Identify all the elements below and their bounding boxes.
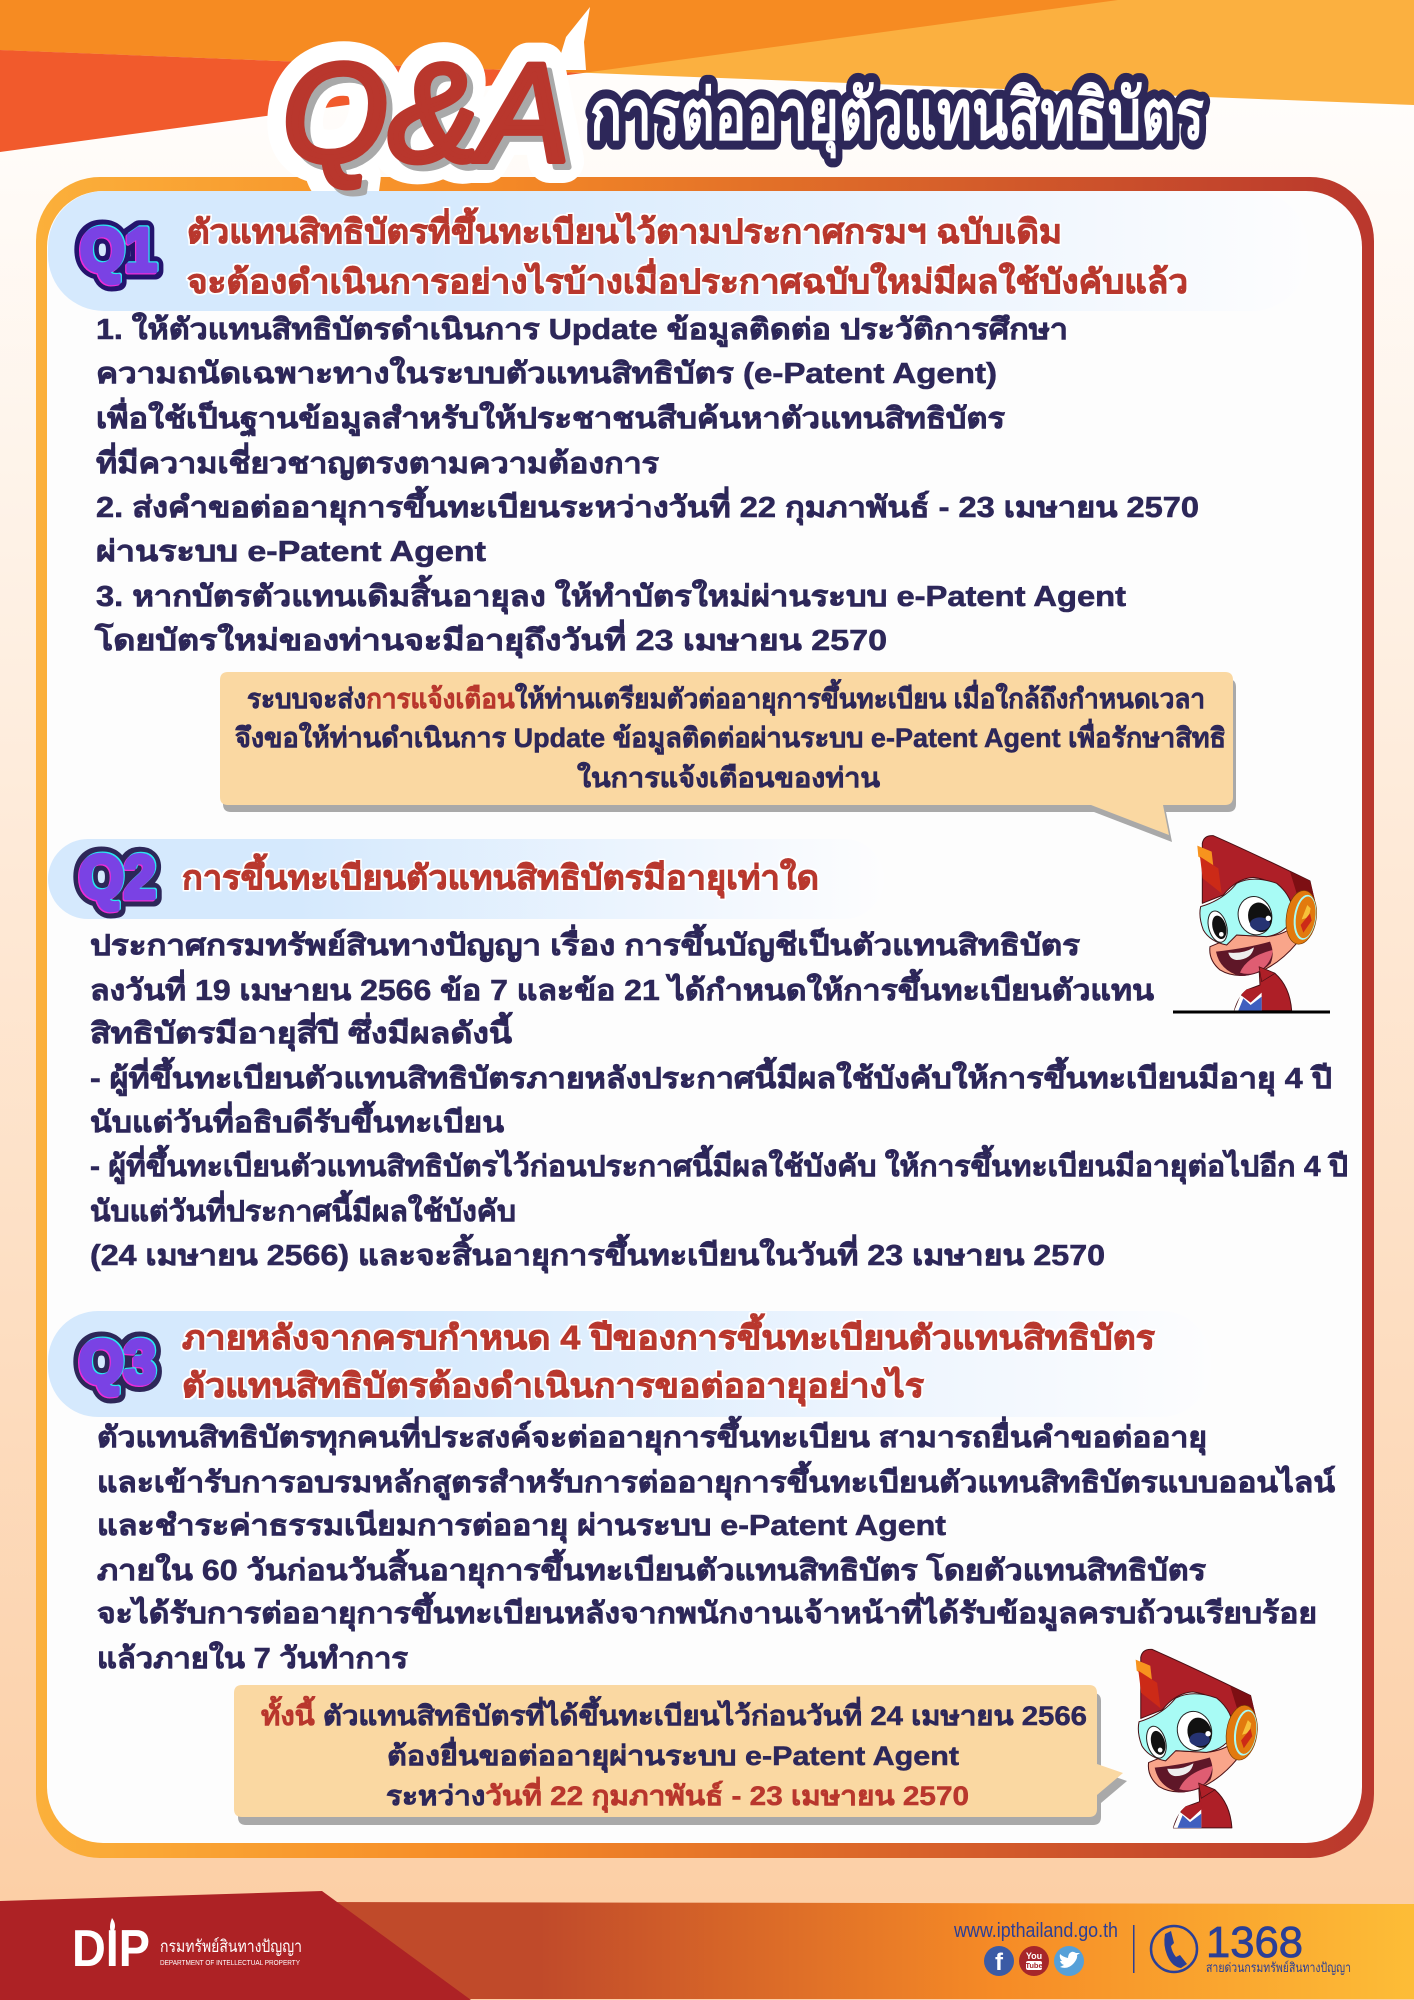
text block: Q2 answer: - ผู้ที่ขึ้นทะเบียนตัวแทนสิทธิบัตรไว้ก่อนประกาศนี้มีผลใช้บังคับ ให้การขึ้นทะเบียนมีอายุต่อไปอีก 4 ปี	[90, 1144, 1348, 1184]
contact: website and social icons: www.ipthailand.go.th	[953, 1920, 1118, 1942]
badge: Q3: Q3	[80, 1327, 157, 1395]
text block: Q1 answer	[94, 312, 1199, 658]
callout: deadline note	[234, 1685, 1127, 1825]
text block: Q3 answer: ภายใน 60 วันก่อนวันสิ้นอายุการขึ้นทะเบียนตัวแทนสิทธิบัตร โดยตัวแทนสิทธิบัตร	[97, 1548, 1206, 1588]
badge: Q3: Q3	[79, 1328, 156, 1396]
footer band	[0, 1891, 1414, 2000]
heading text: Q1: จะต้องดำเนินการอย่างไรบ้างเมื่อประกาศฉบับใหม่มีผลใช้บังคับแล้ว	[187, 258, 1188, 300]
text block: Q2 answer: สิทธิบัตรมีอายุสี่ปี ซึ่งมีผลดังนี้	[90, 1011, 513, 1051]
heading text: Q3: ภายหลังจากครบกำหนด 4 ปีของการขึ้นทะเบียนตัวแทนสิทธิบัตร	[182, 1313, 1155, 1356]
text block: Q2 answer: นับแต่วันที่อธิบดีรับขึ้นทะเบียน	[90, 1100, 504, 1139]
hotline: 1368: 1368	[1206, 1918, 1303, 1967]
heading text: Q3	[182, 1313, 1155, 1407]
text block: Q1 answer: ความถนัดเฉพาะทางในระบบตัวแทนสิทธิบัตร (e-Patent Agent)	[96, 356, 997, 390]
badge: Q2: Q2	[79, 843, 156, 911]
title: Q&A: Q&A	[282, 34, 570, 191]
badge: Q3: Q3	[79, 1328, 156, 1396]
logo: DIP: กรมทรัพย์สินทางปัญญา	[160, 1937, 302, 1956]
text block: Q2 answer: - ผู้ที่ขึ้นทะเบียนตัวแทนสิทธิบัตรภายหลังประกาศนี้มีผลใช้บังคับให้การขึ้นทะเบียนมีอายุ 4 ปี	[90, 1056, 1332, 1096]
text block: Q2 answer: ลงวันที่ 19 เมษายน 2566 ข้อ 7 และข้อ 21 ได้กำหนดให้การขึ้นทะเบียนตัวแทน	[90, 968, 1154, 1007]
heading text: Q2: การขึ้นทะเบียนตัวแทนสิทธิบัตรมีอายุเท่าใด	[182, 853, 819, 899]
title: Q&A: Q&A	[288, 40, 576, 197]
icon: twitter	[1054, 1946, 1084, 1976]
callout: deadline note: ระหว่าง วันที่ 22 กุมภาพันธ์ - 23 เมษายน 2570	[386, 1776, 969, 1813]
callout: deadline note: ทั้งนี้ ตัวแทนสิทธิบัตรที่ได้ขึ้นทะเบียนไว้ก่อนวันที่ 24 เมษายน 2566	[261, 1695, 1087, 1731]
text block: Q1 answer: 1. ให้ตัวแทนสิทธิบัตรดำเนินการ Update ข้อมูลติดต่อ ประวัติการศึกษา	[96, 312, 1068, 347]
callout: notification reminder: ระบบจะส่งการแจ้งเตือนให้ท่านเตรียมตัวต่ออายุการขึ้นทะเบียน เมื่อใกล้ถึงกำหนดเวลา	[247, 678, 1205, 716]
heading text: Q1	[187, 207, 1188, 300]
contact: website and social icons	[953, 1920, 1118, 1976]
logo: DIP	[72, 1918, 302, 1978]
icon: youtube	[1019, 1946, 1049, 1976]
text block: Q1 answer: 3. หากบัตรตัวแทนเดิมสิ้นอายุลง ให้ทำบัตรใหม่ผ่านระบบ e-Patent Agent	[96, 574, 1126, 614]
badge: Q1: Q1	[80, 216, 157, 284]
badge: Q1: Q1	[80, 216, 157, 284]
callout: notification reminder	[220, 672, 1236, 842]
badge: Q2: Q2	[79, 843, 156, 911]
text block: Q2 answer: (24 เมษายน 2566) และจะสิ้นอายุการขึ้นทะเบียนในวันที่ 23 เมษายน 2570	[90, 1233, 1105, 1273]
panel: Q3 heading	[48, 1311, 1211, 1417]
title: Q&A: Q&A	[282, 34, 570, 191]
icon: facebook	[984, 1946, 1014, 1976]
icon: youtube: Tube	[1025, 1961, 1043, 1970]
text block: Q3 answer: และชำระค่าธรรมเนียมการต่ออายุ ผ่านระบบ e-Patent Agent	[97, 1510, 946, 1543]
text block: Q2 answer	[90, 923, 1348, 1273]
text block: Q1 answer: โดยบัตรใหม่ของท่านจะมีอายุถึงวันที่ 23 เมษายน 2570	[94, 619, 887, 658]
text block: Q3 answer: และเข้ารับการอบรมหลักสูตรสำหรับการต่ออายุการขึ้นทะเบียนตัวแทนสิทธิบัตรแบบออนไลน์	[97, 1460, 1335, 1500]
heading text: Q1: ตัวแทนสิทธิบัตรที่ขึ้นทะเบียนไว้ตามประกาศกรมฯ ฉบับเดิม	[187, 207, 1062, 250]
icon: youtube: You	[1026, 1951, 1042, 1961]
panel: main rounded frame	[36, 177, 1374, 1858]
badge: Q1: Q1	[81, 215, 158, 283]
callout: deadline note: ต้องยื่นขอต่ออายุผ่านระบบ e-Patent Agent	[387, 1736, 959, 1773]
header colour shapes	[0, 0, 1414, 152]
heading text: Q3: ตัวแทนสิทธิบัตรต้องดำเนินการขอต่ออายุอย่างไร	[182, 1366, 924, 1407]
icon: mascot top	[1197, 836, 1320, 1011]
hotline: 1368	[1151, 1918, 1351, 1975]
text block: Q3 answer: ตัวแทนสิทธิบัตรทุกคนที่ประสงค์จะต่ออายุการขึ้นทะเบียน สามารถยื่นคำขอต่ออายุ	[97, 1415, 1207, 1455]
badge: Q1: Q1	[79, 217, 156, 285]
badge: Q3: Q3	[78, 1329, 155, 1397]
callout: notification reminder: ในการแจ้งเตือนของท่าน	[577, 762, 881, 793]
text block: Q2 answer: นับแต่วันที่ประกาศนี้มีผลใช้บังคับ	[90, 1189, 516, 1228]
logo: DIP: DEPARTMENT OF INTELLECTUAL PROPERTY	[160, 1958, 300, 1967]
icon: mascot bottom	[1136, 1649, 1261, 1828]
text block: Q1 answer: เพื่อใช้เป็นฐานข้อมูลสำหรับให้ประชาชนสืบค้นหาตัวแทนสิทธิบัตร	[96, 397, 1005, 437]
text block: Q1 answer: 2. ส่งคำขอต่ออายุการขึ้นทะเบียนระหว่างวันที่ 22 กุมภาพันธ์ - 23 เมษายน 2570	[96, 485, 1199, 525]
text block: Q2 answer: ประกาศกรมทรัพย์สินทางปัญญา เรื่อง การขึ้นบัญชีเป็นตัวแทนสิทธิบัตร	[90, 923, 1080, 963]
panel: Q1 heading	[48, 191, 1308, 311]
hotline: 1368: สายด่วนกรมทรัพย์สินทางปัญญา	[1206, 1960, 1351, 1975]
badge: Q2: Q2	[78, 844, 155, 912]
badge: Q2: Q2	[80, 842, 157, 910]
text block: Q1 answer: ที่มีความเชี่ยวชาญตรงตามความต้องการ	[96, 442, 659, 481]
callout: notification reminder: จึงขอให้ท่านดำเนินการ Update ข้อมูลติดต่อผ่านระบบ e-Patent Agent เพื่อรักษาสิทธิ	[235, 718, 1226, 755]
text block: Q1 answer: ผ่านระบบ e-Patent Agent	[96, 536, 486, 568]
panel: Q2 heading	[48, 839, 884, 919]
icon: facebook: f	[995, 1949, 1004, 1976]
text block: Q3 answer: แล้วภายใน 7 วันทำการ	[97, 1641, 408, 1675]
logo: DIP: DIP	[72, 1920, 150, 1978]
text block: Q3 answer	[97, 1415, 1335, 1675]
title: Thai subtitle: การต่ออายุตัวแทนสิทธิบัตร	[590, 76, 1204, 159]
text block: Q3 answer: จะได้รับการต่ออายุการขึ้นทะเบียนหลังจากพนักงานเจ้าหน้าที่ได้รับข้อมูลครบถ้วนเรียบร้อย	[97, 1591, 1317, 1631]
